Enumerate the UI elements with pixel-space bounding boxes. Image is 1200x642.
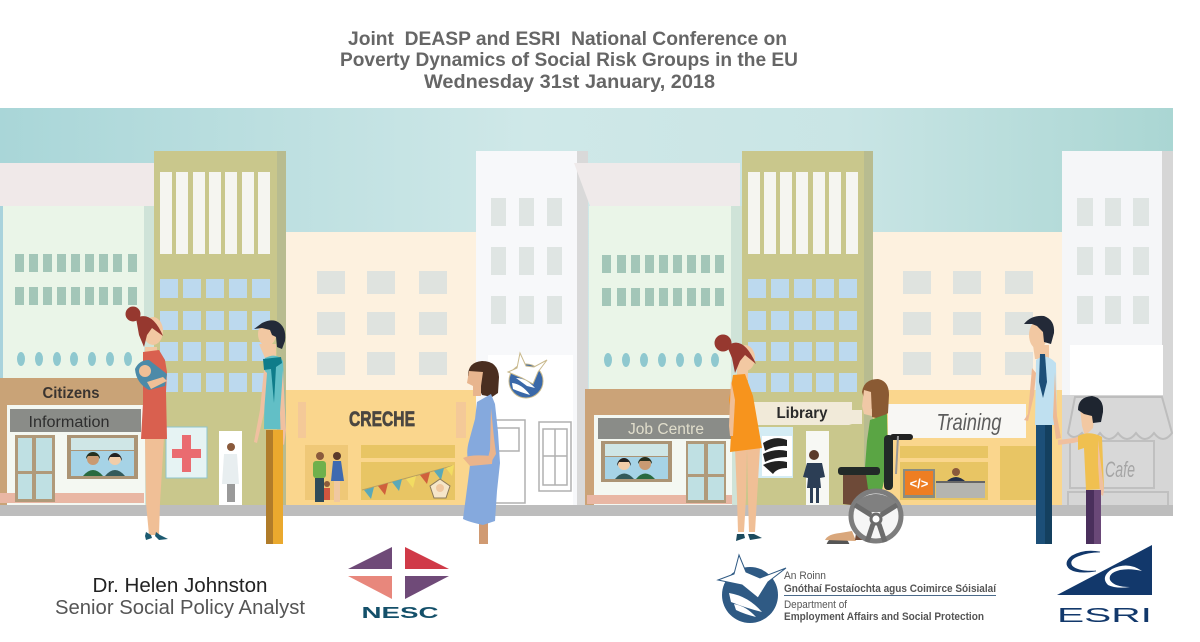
figure: boy holding hand xyxy=(1058,396,1104,544)
logo: NESC xyxy=(348,547,449,622)
family in window xyxy=(313,452,344,502)
shop sign: information xyxy=(10,409,141,432)
shop sign: training xyxy=(888,404,1026,438)
title: Poverty Dynamics of Social Risk Groups in the EU xyxy=(340,49,798,71)
building: creche xyxy=(286,232,476,506)
icon: dove in circle xyxy=(718,555,786,623)
cafe sign xyxy=(1070,441,1154,488)
waitress in doorway xyxy=(803,431,829,505)
logo: ESRI: ESRI xyxy=(1057,605,1152,627)
logo: NESC: NESC xyxy=(362,605,439,622)
door xyxy=(686,441,726,503)
figure: woman in orange dress xyxy=(714,334,762,541)
building: training xyxy=(873,232,1062,506)
figure: person in wheelchair xyxy=(825,379,910,560)
figure: man with blue shirt xyxy=(1024,316,1061,544)
sky xyxy=(0,108,1173,389)
window with two people xyxy=(601,441,672,482)
icon: dove logo on building xyxy=(508,353,547,398)
doctor in doorway xyxy=(219,431,242,505)
doorway xyxy=(496,419,526,504)
window xyxy=(539,422,571,491)
shop sign: citizens: Citizens xyxy=(42,385,100,402)
icon: laptop with code: </> xyxy=(910,476,929,491)
title: Wednesday 31st January, 2018 xyxy=(424,71,715,93)
shop sign: information: Information xyxy=(28,414,110,431)
cafe awning xyxy=(1068,397,1172,439)
medical cross sign xyxy=(166,427,207,478)
icon: laptop with code xyxy=(903,469,935,498)
shop sign: library xyxy=(752,402,862,425)
shop sign: job centre: Job Centre xyxy=(628,421,704,438)
shop sign: training: Training xyxy=(936,409,1002,435)
building: cafe xyxy=(1062,151,1173,506)
logo: Department of Employment Affairs and Social Protection: Department of xyxy=(784,599,848,611)
logo: Department of Employment Affairs and Social Protection: Employment Affairs and Social Protection xyxy=(784,611,984,623)
shop sign: creche: CRECHE xyxy=(349,408,415,431)
building: white with dove logo xyxy=(476,151,588,506)
speaker name and role: Senior Social Policy Analyst xyxy=(55,597,305,619)
title: Joint DEASP and ESRI National Conference on xyxy=(348,28,787,50)
logo: Department of Employment Affairs and Social Protection: Gnóthaí Fostaíochta agus Coimirce Sóisialaí xyxy=(784,583,997,595)
cafe sign: Cafe xyxy=(1105,457,1135,482)
building: olive tower xyxy=(154,151,286,506)
shop sign: library: Library xyxy=(776,405,828,422)
speaker name and role xyxy=(55,575,305,619)
shop sign: job centre xyxy=(598,418,731,439)
wheelchair wheel xyxy=(851,491,901,542)
icon: stack of books poster xyxy=(758,427,793,478)
figure: man with teal shirt xyxy=(254,320,286,544)
title xyxy=(340,28,798,93)
figure: pregnant woman xyxy=(463,361,500,544)
logo: ESRI xyxy=(1057,545,1152,627)
pavement xyxy=(0,505,1173,516)
building: library tower xyxy=(742,151,873,506)
logo: Department of Employment Affairs and Social Protection xyxy=(718,555,997,623)
window with two people xyxy=(67,435,138,479)
baby icon xyxy=(430,479,450,498)
building: citizens information xyxy=(0,163,154,506)
street scene illustration xyxy=(0,108,1173,560)
bunting xyxy=(362,465,454,499)
logo: Department of Employment Affairs and Social Protection: An Roinn xyxy=(784,570,826,582)
figure: mother with baby xyxy=(126,306,168,540)
speaker name and role: Dr. Helen Johnston xyxy=(92,575,268,597)
receptionist at desk xyxy=(936,468,985,498)
door xyxy=(15,435,55,502)
building: job centre xyxy=(574,163,742,506)
